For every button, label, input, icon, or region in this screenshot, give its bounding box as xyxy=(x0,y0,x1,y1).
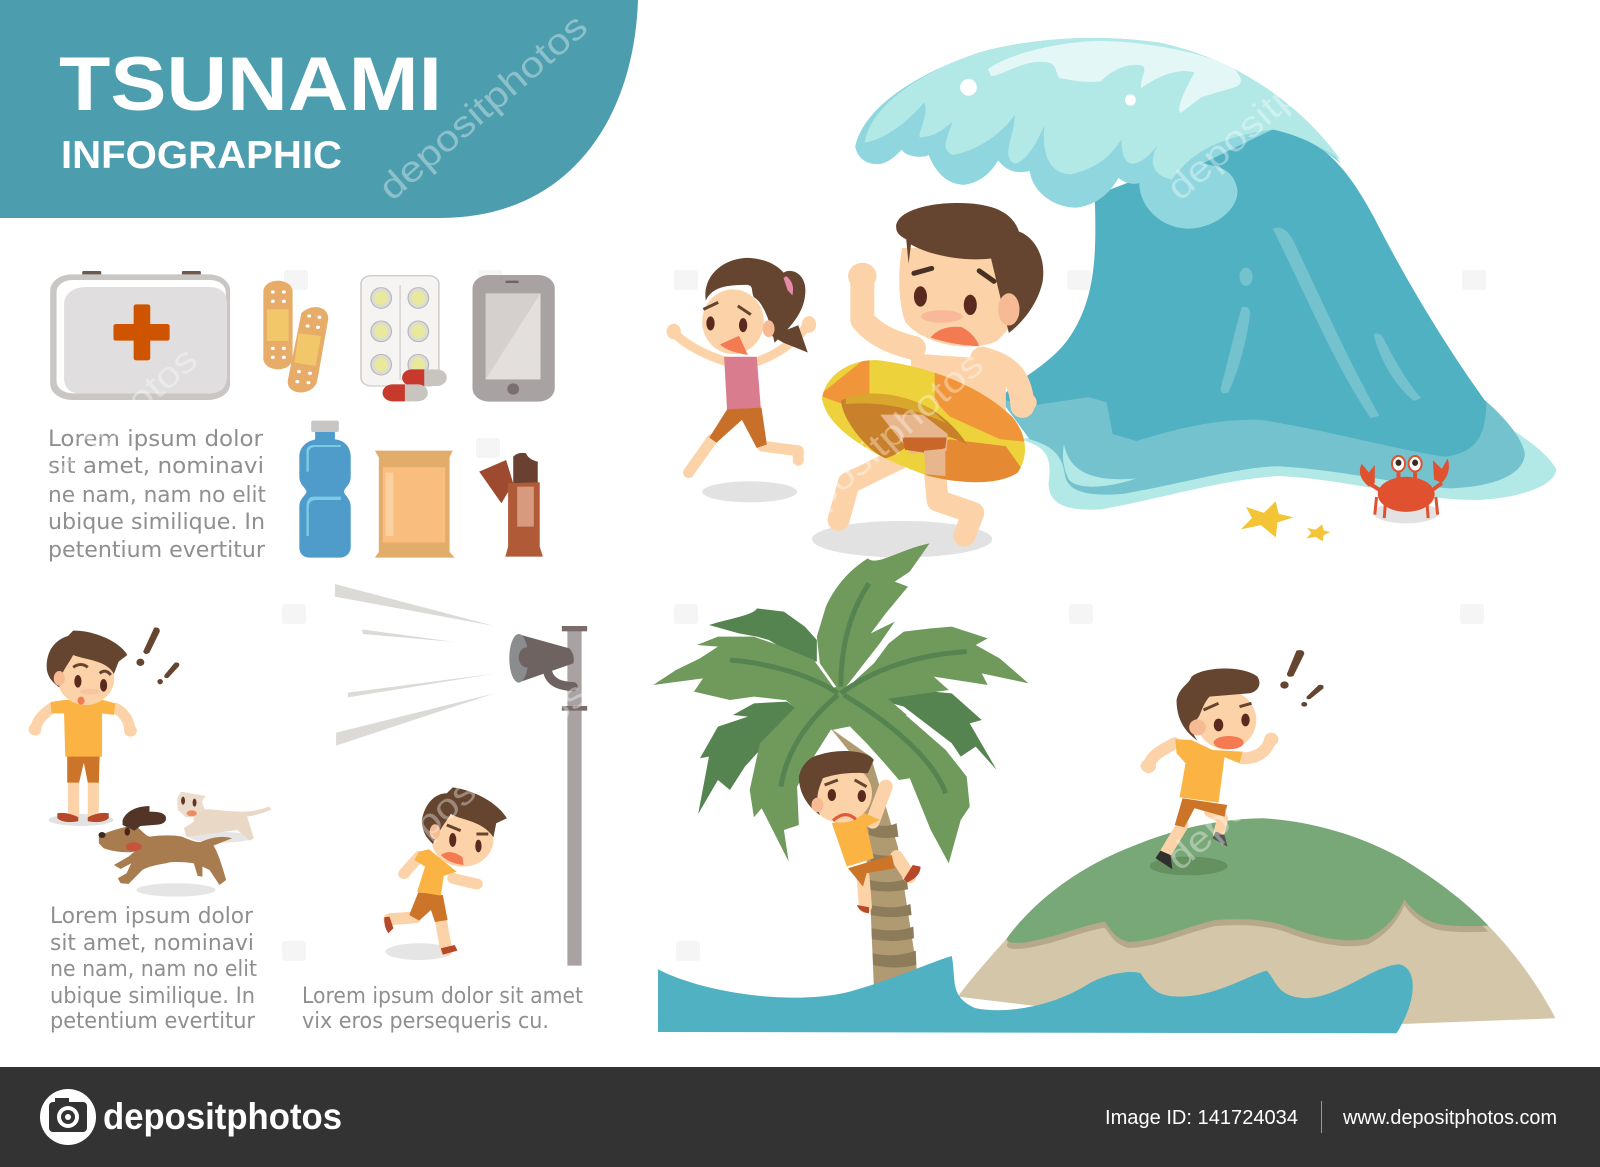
text block: kit description: petentium evertitur xyxy=(48,538,266,563)
panel: emergency kit items xyxy=(50,271,555,558)
watermarks: depositphotos xyxy=(370,673,595,876)
panel: giant wave scene xyxy=(667,38,1556,557)
figure: boy standing alarmed xyxy=(28,627,179,826)
panel: warning signs scene xyxy=(28,584,587,966)
icon: exclamation marks xyxy=(1280,650,1324,707)
figure: boy climbing palm xyxy=(799,751,921,913)
icon: exclamation marks xyxy=(136,627,179,684)
icon: red cross xyxy=(113,304,170,360)
icon: pill blister pack xyxy=(361,276,447,401)
palm trunk xyxy=(831,728,917,986)
icon: chocolate bar xyxy=(479,453,543,557)
text block: animals warning: Lorem ipsum dolor xyxy=(50,904,254,929)
watermarks: depositphotos xyxy=(1158,5,1383,208)
swim ring xyxy=(822,360,1026,482)
figure: fleeing cat xyxy=(177,792,272,843)
figure: girl running xyxy=(667,258,816,502)
text block: animals warning: sit amet, nominavi xyxy=(50,931,254,956)
icon: first aid kit xyxy=(50,271,230,400)
text block: animals warning: ne nam, nam no elit xyxy=(50,957,257,982)
website url: www.depositphotos.com xyxy=(1342,1107,1557,1129)
text block: animals warning: ubique similique. In xyxy=(50,984,255,1009)
icon: siren sound beams xyxy=(335,584,496,746)
illustration: tsunami wave xyxy=(855,38,1556,510)
panel: palm tree and island scene xyxy=(653,543,1555,1033)
palm leaves xyxy=(653,543,1028,863)
text block: kit description xyxy=(48,427,266,563)
image id: Image ID: 141724034 xyxy=(1105,1107,1298,1129)
icon: water bottle xyxy=(299,421,351,558)
figure: fleeing dog xyxy=(98,806,232,897)
icon: camera logo xyxy=(40,1089,96,1145)
illustration: palm tree xyxy=(653,543,1028,986)
text block: siren caption: vix eros persequeris cu. xyxy=(302,1009,549,1034)
icon: siren pole and speaker xyxy=(509,626,587,966)
text block: animals warning: petentium evertitur xyxy=(50,1009,256,1034)
title banner xyxy=(0,0,638,218)
text block: siren caption: Lorem ipsum dolor sit amet xyxy=(302,984,583,1009)
text block: kit description: sit amet, nominavi xyxy=(48,454,264,479)
figure: boy running on hill xyxy=(1141,650,1324,875)
heading: tsunami: TSUNAMI xyxy=(59,42,442,127)
figure: boy running from siren xyxy=(384,787,507,960)
icon: food pouch xyxy=(375,451,455,558)
text block: animals warning xyxy=(50,904,257,1034)
footer bar xyxy=(0,1067,1600,1167)
watermarks xyxy=(0,5,1383,878)
illustration: sea water xyxy=(658,956,1413,1033)
text block: siren caption xyxy=(302,984,583,1034)
icon: starfish xyxy=(1241,501,1330,541)
logo wordmark: depositphotos xyxy=(103,1096,342,1137)
icon: bandages xyxy=(263,281,328,392)
watermarks: depositphotos xyxy=(1158,675,1383,878)
watermarks: depositphotos xyxy=(370,5,595,208)
icon: capsules xyxy=(383,369,447,401)
figure: boy with swim ring xyxy=(812,203,1043,557)
heading: infographic: INFOGRAPHIC xyxy=(61,134,342,177)
watermarks: depositphotos xyxy=(766,343,991,546)
text block: kit description: Lorem ipsum dolor xyxy=(48,427,264,452)
illustration: island hill xyxy=(958,818,1555,1024)
icon: smartphone xyxy=(473,275,555,402)
text block: kit description: ubique similique. In xyxy=(48,510,265,535)
icon: red crab xyxy=(1360,456,1449,523)
text block: kit description: ne nam, nam no elit xyxy=(48,483,266,508)
